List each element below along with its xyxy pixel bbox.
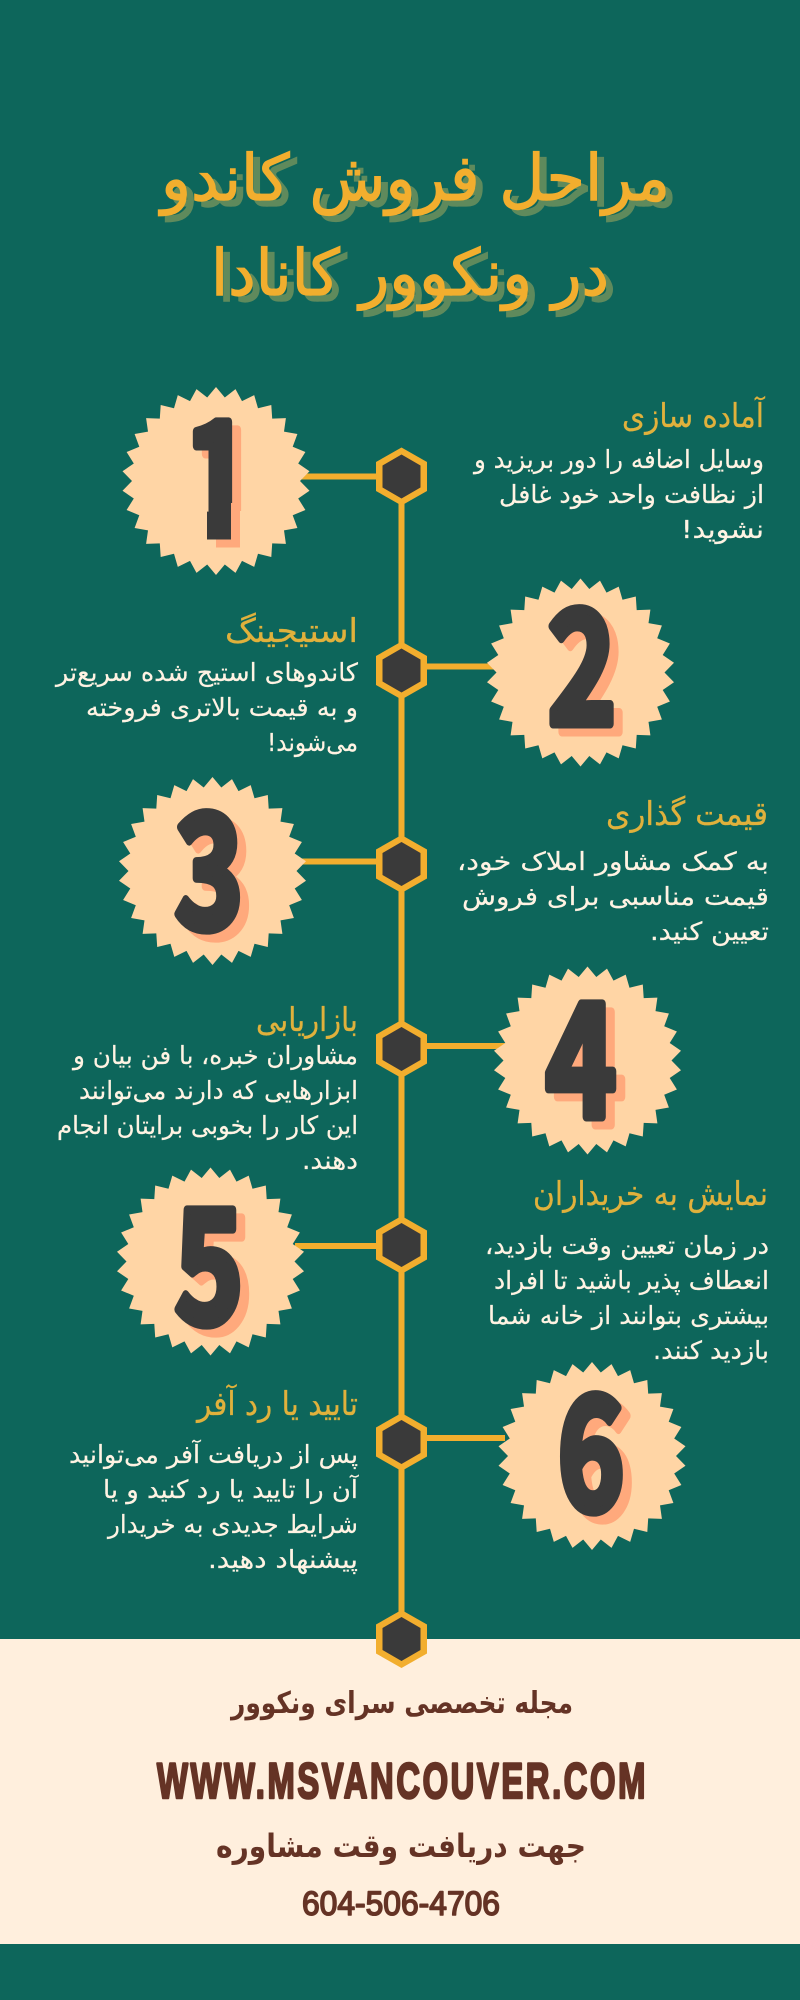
footer band bbox=[0, 1639, 800, 1944]
body 5: انعطاف پذیر باشید تا افراد bbox=[494, 1266, 769, 1295]
step 5 bbox=[117, 1141, 769, 1368]
heading 5: نمایش به خریداران bbox=[533, 1174, 768, 1213]
number badge 3 bbox=[119, 746, 306, 973]
hexagon node 1 bbox=[376, 448, 427, 506]
heading 3: قیمت گذاری bbox=[606, 794, 768, 833]
body 2: و به قیمت بالاتری فروخته bbox=[86, 693, 358, 723]
number badge 2 bbox=[487, 542, 674, 769]
body 4: دهند. bbox=[302, 1146, 358, 1175]
heading 6: تایید یا رد آفر bbox=[195, 1384, 358, 1423]
hexagon node 4 bbox=[376, 1020, 427, 1078]
body 6: شرایط جدیدی به خریدار bbox=[106, 1510, 358, 1539]
phone number: 604-506-4706 bbox=[302, 1885, 500, 1923]
body 3: به کمک مشاور املاک خود، bbox=[457, 847, 769, 877]
hexagon node 5 bbox=[376, 1216, 427, 1274]
body 6 bbox=[69, 1439, 359, 1575]
connector 5 bbox=[295, 1243, 380, 1249]
number badge 4: 4 bbox=[546, 936, 616, 1163]
body 1: وسایل اضافه را دور بریزید و bbox=[472, 445, 764, 475]
step 6 bbox=[69, 1329, 686, 1575]
connector 4 bbox=[420, 1043, 505, 1049]
hexagon node 3 bbox=[376, 835, 427, 893]
connector 2 bbox=[420, 664, 500, 670]
body 3 bbox=[457, 847, 769, 946]
body 4: این کار را بخوبی برایتان انجام bbox=[57, 1111, 358, 1140]
body 1 bbox=[472, 445, 764, 544]
body 4 bbox=[57, 1041, 358, 1175]
body 3: تعیین کنید. bbox=[650, 917, 769, 946]
heading 1: آماده سازی bbox=[622, 396, 766, 435]
body 1: نشوید! bbox=[681, 515, 764, 544]
number badge 6: 6 bbox=[558, 1329, 624, 1556]
step 4 bbox=[57, 936, 681, 1175]
body 2: می‌شوند! bbox=[267, 728, 358, 757]
footer text bbox=[157, 1686, 648, 1923]
step 1 bbox=[122, 387, 766, 575]
number badge 4 bbox=[494, 936, 681, 1163]
number badge 2: 2 bbox=[548, 542, 616, 769]
hexagon node 2 bbox=[376, 642, 427, 700]
connector 3 bbox=[295, 858, 380, 864]
body 6: آن را تایید یا رد کنید و یا bbox=[103, 1474, 359, 1505]
connector 1 bbox=[300, 474, 380, 480]
title: مراحل فروش کاندو bbox=[158, 142, 670, 216]
number badge 1 bbox=[122, 387, 310, 575]
connector 6 bbox=[420, 1435, 505, 1441]
number badge 6 bbox=[498, 1329, 686, 1556]
consultation line: جهت دریافت وقت مشاوره bbox=[216, 1827, 586, 1865]
title: در ونکوور کانادا bbox=[211, 237, 609, 311]
body 5 bbox=[485, 1231, 769, 1365]
heading 4: بازاریابی bbox=[256, 1000, 358, 1039]
step 3 bbox=[119, 746, 769, 973]
number badge 3: 3 bbox=[175, 746, 243, 973]
body 2 bbox=[54, 658, 358, 757]
magazine name: مجله تخصصی سرای ونکوور bbox=[229, 1686, 573, 1721]
number badge 1: 1 bbox=[184, 353, 252, 580]
number badge 5: 5 bbox=[175, 1141, 243, 1368]
hexagon node 6 bbox=[376, 1413, 427, 1471]
body 1: از نظافت واحد خود غافل bbox=[499, 480, 764, 510]
title bbox=[158, 142, 670, 311]
body 4: مشاوران خبره، با فن بیان و bbox=[71, 1041, 358, 1071]
step 2 bbox=[54, 542, 674, 769]
heading 2: استیجینگ bbox=[225, 611, 358, 650]
body 3: قیمت مناسبی برای فروش bbox=[462, 882, 769, 912]
body 5: بازدید کنند. bbox=[653, 1336, 769, 1365]
body 5: در زمان تعیین وقت بازدید، bbox=[485, 1231, 769, 1261]
number badge 5 bbox=[117, 1141, 304, 1368]
body 2: کاندوهای استیج شده سریع‌تر bbox=[54, 658, 358, 688]
final hexagon node bbox=[376, 1610, 427, 1668]
body 4: ابزارهایی که دارند می‌توانند bbox=[79, 1076, 358, 1105]
body 6: پیشنهاد دهید. bbox=[208, 1545, 358, 1575]
body 5: بیشتری بتوانند از خانه شما bbox=[488, 1301, 769, 1330]
timeline spine bbox=[398, 476, 404, 1640]
body 6: پس از دریافت آفر می‌توانید bbox=[69, 1439, 358, 1469]
